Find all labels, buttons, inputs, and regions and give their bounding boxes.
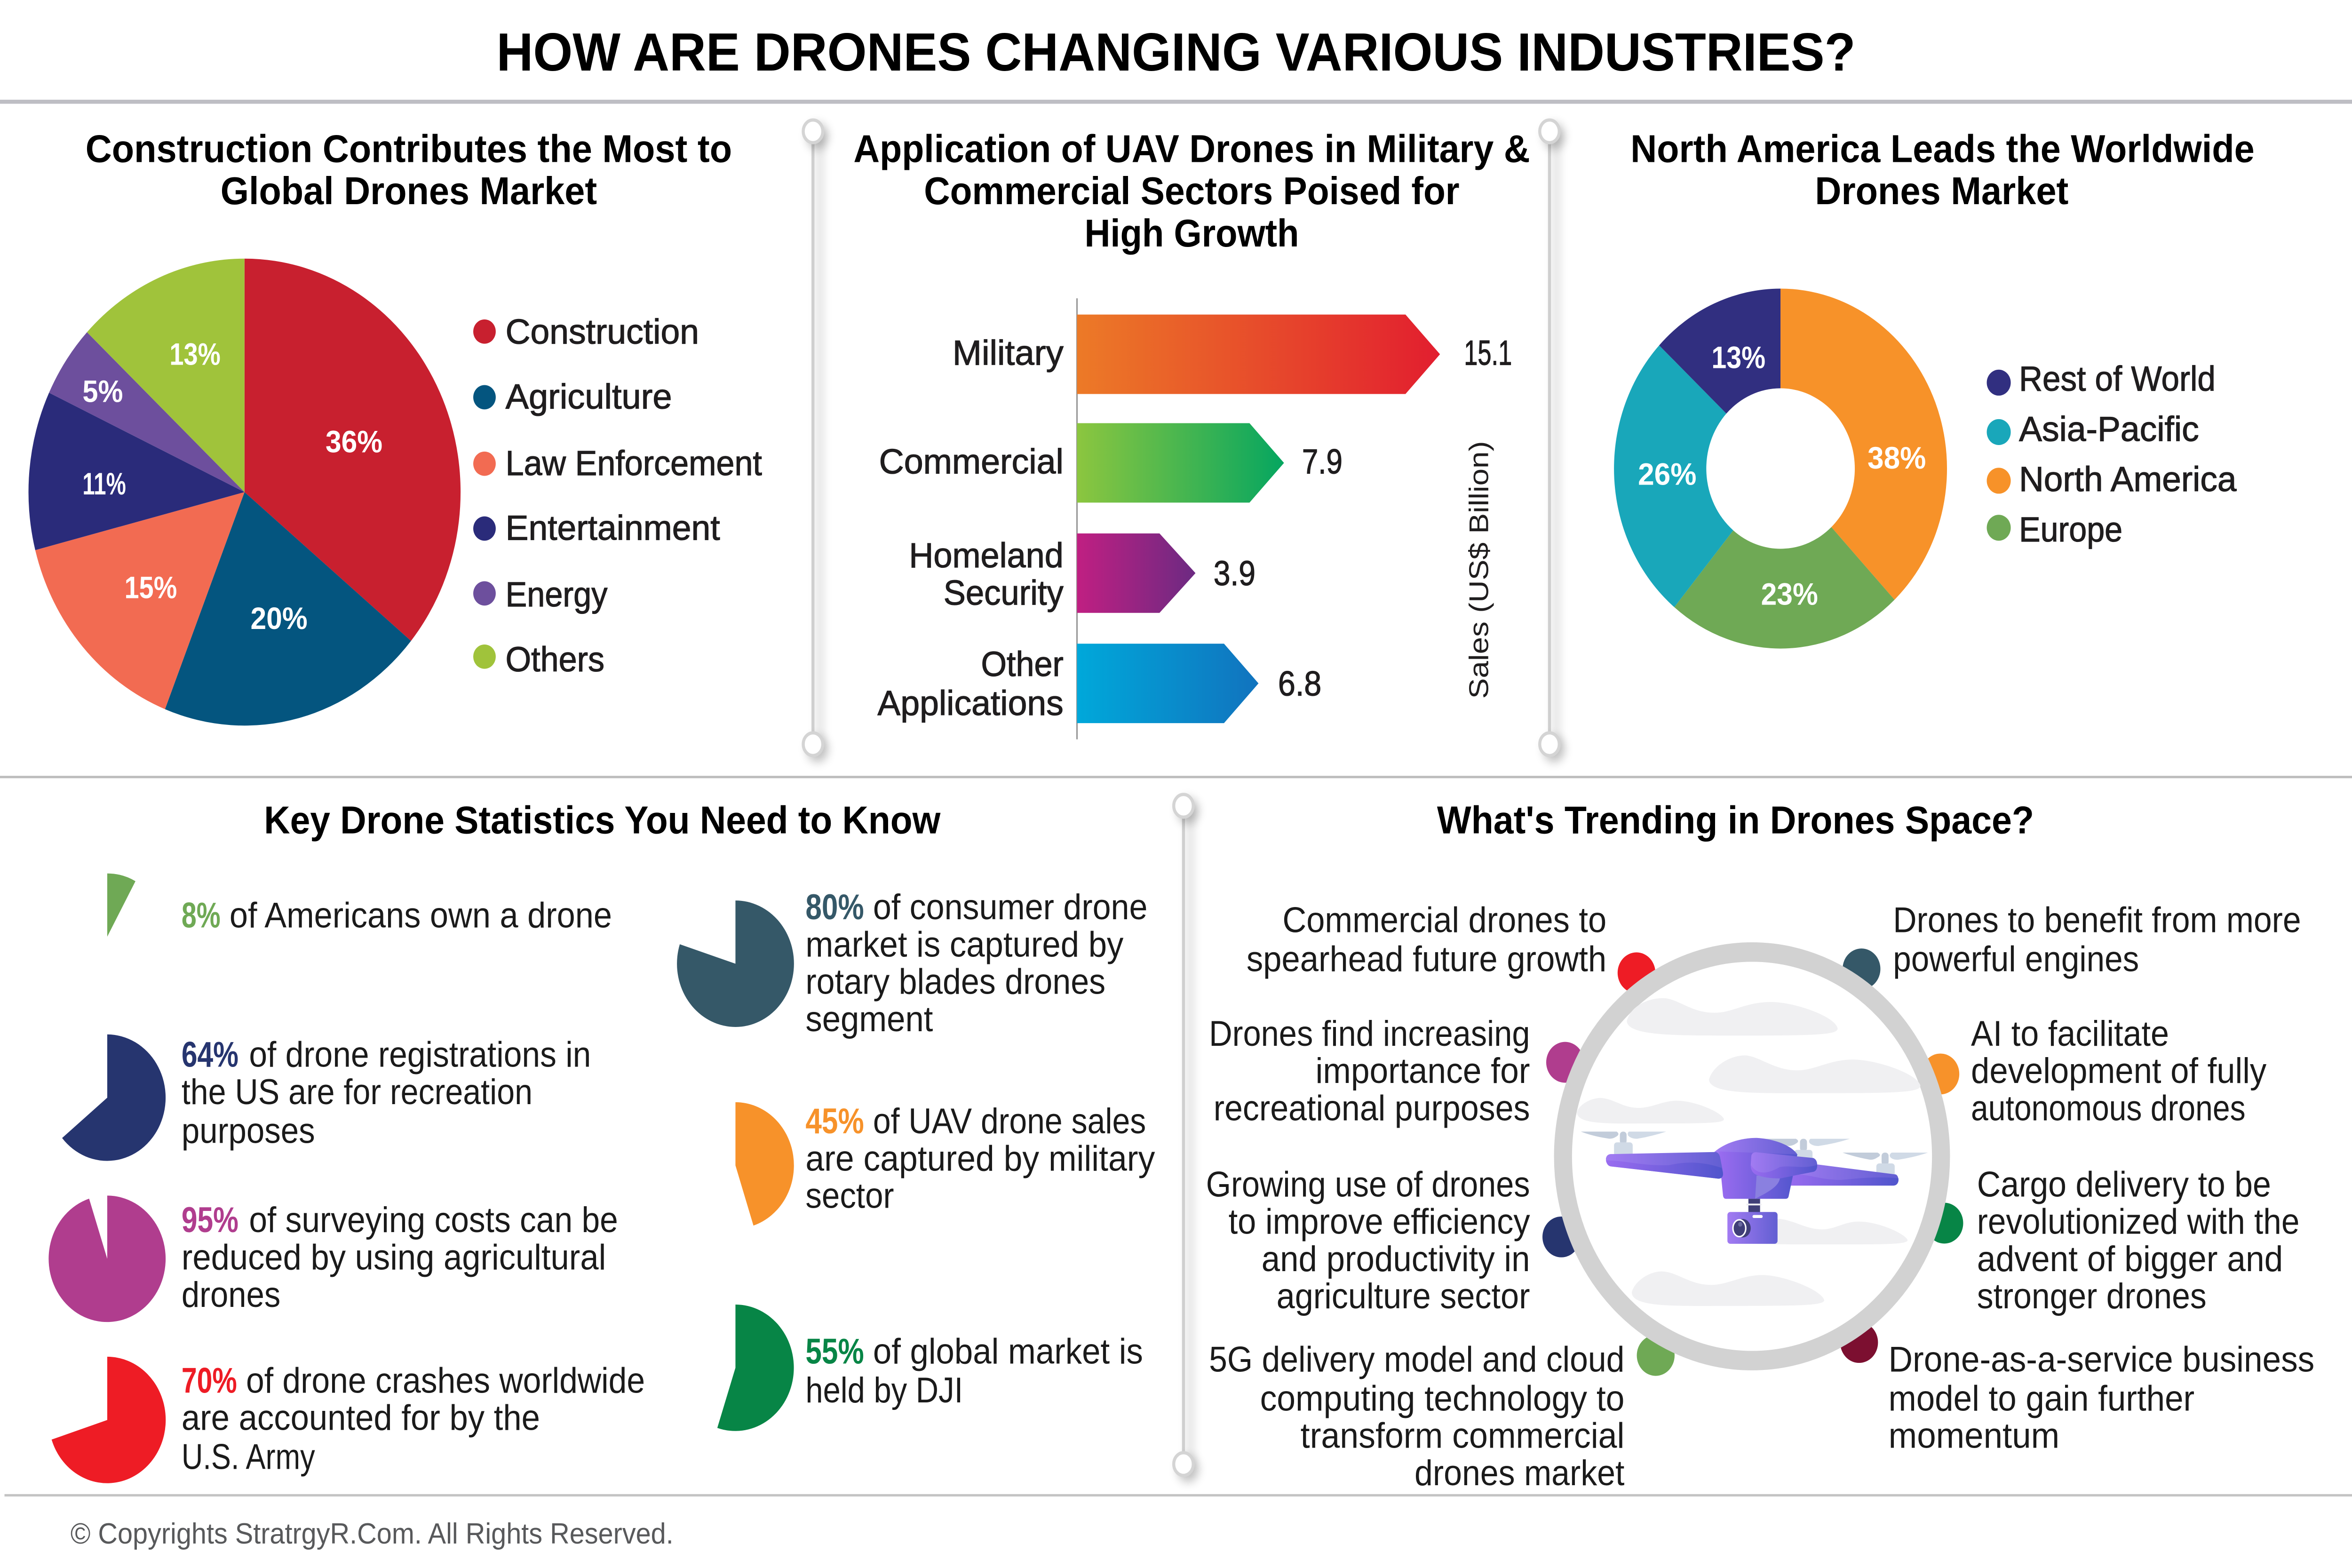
- stat: 8 percent: 8%: [182, 896, 221, 935]
- stat: 45 percent: are captured by military: [805, 1139, 1155, 1178]
- panel: key drone statistics: [48, 798, 1155, 1483]
- stat: 95 percent: drones: [182, 1275, 280, 1314]
- heading: construction: Global Drones Market: [221, 169, 597, 213]
- heading: North America: North America Leads the Worldwide: [1630, 127, 2255, 170]
- legend: regions: [1987, 359, 2237, 549]
- heading: key statistics: Key Drone Statistics You Need to Know: [264, 798, 941, 842]
- stat: 55 percent: held by DJI: [805, 1371, 963, 1410]
- stat: 55 percent: 55%: [805, 1332, 864, 1371]
- trend: 5G delivery: drones market: [1414, 1453, 1624, 1493]
- trend: drone as a service: Drone-as-a-service business: [1889, 1340, 2314, 1379]
- stat: 70 percent: are accounted for by the: [182, 1398, 540, 1438]
- donut chart: regions: [1614, 288, 1947, 649]
- stat: 95 percent: 95%: [182, 1201, 238, 1240]
- legend: regions: Asia-Pacific: [2019, 410, 2199, 449]
- trend: agriculture: Growing use of drones: [1206, 1165, 1530, 1204]
- trend: AI autonomy: autonomous drones: [1971, 1089, 2246, 1128]
- trend: 5G delivery: computing technology to: [1260, 1379, 1624, 1418]
- stat: 55 percent: [717, 1305, 1143, 1431]
- legend: industries: [473, 312, 762, 679]
- bar chart: Commercial: [879, 442, 1064, 481]
- heading: North America: Drones Market: [1815, 169, 2068, 213]
- panel: regional donut chart: [1614, 127, 2255, 649]
- heading: construction: [86, 127, 732, 213]
- panel: UAV application bar chart: [853, 127, 1530, 740]
- trend: cargo delivery: Cargo delivery to be: [1977, 1165, 2271, 1204]
- trend: cargo delivery: stronger drones: [1977, 1277, 2207, 1316]
- bar chart: Military: [953, 334, 1064, 373]
- bar chart: Other: [981, 645, 1064, 684]
- stat: 64 percent: 64%: [182, 1035, 238, 1075]
- stat: 45 percent: sector: [805, 1176, 894, 1216]
- colored marker dots: [1542, 948, 1963, 1376]
- bar chart: [877, 298, 1512, 740]
- trend: AI autonomy: development of fully: [1971, 1051, 2267, 1091]
- trend: recreational purposes: recreational purposes: [1214, 1089, 1530, 1128]
- trend: cargo delivery: revolutionized with the: [1977, 1202, 2299, 1242]
- legend: industries: Entertainment: [506, 509, 720, 548]
- stat: 64 percent: of drone registrations in: [249, 1035, 591, 1075]
- trend: powerful engines: powerful engines: [1893, 939, 2139, 979]
- stat: 70 percent: 70%: [182, 1361, 237, 1401]
- stat: 45 percent: of UAV drone sales: [873, 1102, 1146, 1141]
- trend: commercial growth: spearhead future growth: [1247, 939, 1606, 979]
- stat: 95 percent: [48, 1195, 618, 1322]
- trend: drone as a service: model to gain further: [1889, 1379, 2194, 1418]
- stat: 80 percent: market is captured by: [805, 925, 1124, 964]
- illustration: clouds and drone: [1577, 998, 1928, 1306]
- stat: 45 percent: [735, 1102, 1155, 1226]
- heading: UAV application: High Growth: [1084, 211, 1299, 255]
- legend: industries: Agriculture: [506, 377, 672, 416]
- trend: powerful engines: Drones to benefit from more: [1893, 900, 2301, 940]
- legend: industries: Others: [506, 640, 604, 679]
- trend: commercial growth: [1247, 900, 1606, 979]
- title: HOW ARE DRONES CHANGING VARIOUS INDUSTRIES?: [496, 23, 1856, 82]
- heading: UAV application: Application of UAV Drones in Military &: [853, 127, 1530, 170]
- ring with sky: [1563, 952, 1941, 1361]
- bar chart: 7.9: [1302, 442, 1343, 481]
- trend: recreational purposes: [1209, 1014, 1530, 1128]
- trend: drone as a service: momentum: [1889, 1416, 2059, 1456]
- pie chart: industries: 11%: [82, 467, 126, 501]
- heading: North America: [1630, 127, 2255, 213]
- heading: UAV application: [853, 127, 1530, 255]
- trend: commercial growth: Commercial drones to: [1282, 900, 1606, 940]
- trend: agriculture: [1206, 1165, 1530, 1316]
- stat: 64 percent: purposes: [182, 1111, 315, 1151]
- pie chart: industries: 13%: [169, 337, 221, 372]
- stat: 55 percent: of global market is: [873, 1332, 1143, 1371]
- trend: cargo delivery: [1977, 1165, 2299, 1316]
- legend: industries: Construction: [506, 312, 699, 351]
- stat: 45 percent: 45%: [805, 1102, 864, 1141]
- pie chart: industries: 36%: [326, 425, 382, 459]
- trend: 5G delivery: [1209, 1340, 1624, 1493]
- legend: industries: Law Enforcement: [506, 444, 762, 483]
- bar chart: 6.8: [1278, 664, 1321, 703]
- heading: UAV application: Commercial Sectors Poised for: [924, 169, 1460, 213]
- donut chart: regions: 23%: [1761, 577, 1818, 612]
- pie chart: industries: 15%: [125, 571, 177, 605]
- stat: 95 percent: reduced by using agricultural: [182, 1238, 606, 1277]
- stat: 70 percent: [52, 1357, 645, 1483]
- stat: 64 percent: the US are for recreation: [182, 1073, 532, 1112]
- stat: 80 percent: of consumer drone: [873, 888, 1147, 927]
- donut chart: regions: 26%: [1638, 457, 1697, 492]
- trend: 5G delivery: 5G delivery model and cloud: [1209, 1340, 1624, 1379]
- footer copyright: © Copyrights StratrgyR.Com. All Rights Reserved.: [71, 1517, 674, 1550]
- trend: recreational purposes: importance for: [1316, 1051, 1530, 1091]
- trend: AI autonomy: [1971, 1014, 2267, 1128]
- donut chart: regions: 38%: [1867, 441, 1926, 476]
- legend: regions: Europe: [2019, 510, 2122, 549]
- trend: powerful engines: [1893, 900, 2301, 979]
- trend: agriculture: and productivity in: [1262, 1239, 1530, 1279]
- pie chart: industries: [29, 259, 461, 725]
- trend: agriculture: to improve efficiency: [1229, 1202, 1530, 1242]
- stat: 80 percent: 80%: [805, 888, 864, 927]
- trend: recreational purposes: Drones find increasing: [1209, 1014, 1530, 1054]
- legend: regions: Rest of World: [2019, 359, 2216, 398]
- panel: construction pie chart: [29, 127, 762, 725]
- bar chart: 3.9: [1214, 554, 1255, 593]
- heading: construction: Construction Contributes the Most to: [86, 127, 732, 170]
- heading: trending: What's Trending in Drones Space?: [1437, 798, 2034, 842]
- axis title: Sales (US$ Billion): [1463, 441, 1494, 699]
- pie chart: industries: 20%: [251, 602, 308, 636]
- clouds: [1577, 998, 1920, 1306]
- stat: 95 percent: of surveying costs can be: [249, 1201, 618, 1240]
- stat: 8 percent: [107, 874, 612, 937]
- bar chart: 15.1: [1464, 334, 1512, 373]
- stat: 70 percent: of drone crashes worldwide: [246, 1361, 645, 1401]
- stat: 80 percent: [677, 888, 1147, 1039]
- trend: cargo delivery: advent of bigger and: [1977, 1239, 2283, 1279]
- bar chart: Homeland: [909, 536, 1064, 575]
- pie chart: industries: 5%: [82, 375, 123, 409]
- stat: 80 percent: segment: [805, 999, 933, 1039]
- stat: 8 percent: of Americans own a drone: [230, 896, 612, 935]
- stat: 80 percent: rotary blades drones: [805, 962, 1105, 1002]
- legend: industries: Energy: [506, 575, 608, 614]
- stat: 64 percent: [62, 1035, 591, 1161]
- stat: 70 percent: U.S. Army: [182, 1437, 315, 1477]
- bar chart: Applications: [877, 684, 1064, 723]
- bar chart: Security: [944, 573, 1064, 613]
- trend: drone as a service: [1889, 1340, 2314, 1456]
- legend: regions: North America: [2019, 460, 2237, 499]
- donut chart: regions: 13%: [1711, 341, 1765, 375]
- panel: trending in drones space: [1206, 798, 2314, 1493]
- trend: AI autonomy: AI to facilitate: [1971, 1014, 2169, 1054]
- trend: 5G delivery: transform commercial: [1301, 1416, 1624, 1456]
- drone: [1581, 1131, 1928, 1244]
- trend: agriculture: agriculture sector: [1277, 1277, 1530, 1316]
